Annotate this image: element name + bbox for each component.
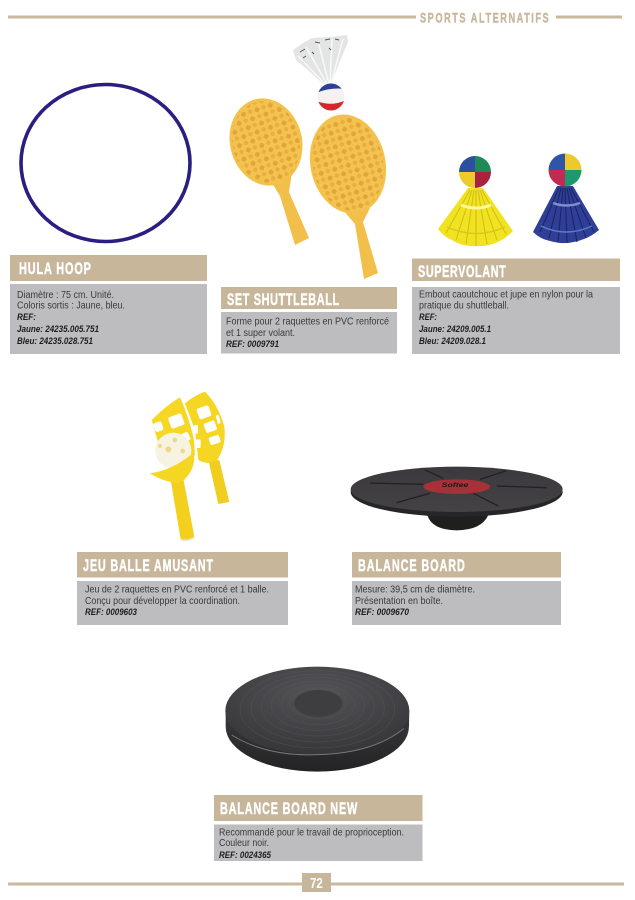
- text block: balance board new details: Recommandé pour le travail de proprioception.: [219, 828, 404, 838]
- text block: shuttleball details: Forme pour 2 raquettes en PVC renforcé: [226, 316, 389, 328]
- panel: set shuttleball: [220, 35, 397, 354]
- text block: shuttleball details: [221, 312, 397, 354]
- heading: jeu balle amusant: JEU BALLE AMUSANT: [83, 556, 213, 575]
- text block: balance board details: Présentation en boîte.: [355, 596, 443, 607]
- text block: supervolant details: pratique du shuttleball.: [419, 300, 509, 312]
- heading: supervolant: [412, 258, 620, 281]
- heading: set shuttleball: SET SHUTTLEBALL: [227, 290, 340, 309]
- icon: blue supervolant: [533, 153, 599, 243]
- text block: supervolant details: Bleu: 24209.028.1: [419, 336, 486, 346]
- icon: shuttlecock with tricolour ball: [293, 35, 348, 112]
- text block: hula hoop details: Bleu: 24235.028.751: [17, 336, 93, 346]
- heading: hula hoop: HULA HOOP: [19, 259, 91, 278]
- text block: balance board new details: REF: 0024365: [219, 850, 271, 860]
- text block: shuttleball details: REF: 0009791: [226, 339, 279, 349]
- text block: balance board details: Mesure: 39,5 cm de diamètre.: [355, 584, 475, 596]
- text block: balance board new details: Couleur noir.: [219, 838, 269, 849]
- panel: jeu balle amusant: [77, 392, 288, 625]
- heading: supervolant: SUPERVOLANT: [418, 262, 506, 281]
- icon: balance board with red centre: [351, 467, 563, 530]
- text block: shuttleball details: et 1 super volant.: [226, 328, 295, 339]
- icon: hula hoop ring: [21, 84, 190, 242]
- text block: jeu balle details: Conçu pour développer la coordination.: [85, 596, 240, 607]
- heading: balance board new: [214, 795, 422, 821]
- icon: right racket: [301, 107, 395, 279]
- panel: supervolant: [412, 153, 620, 354]
- text block: supervolant details: Embout caoutchouc et jupe en nylon pour la: [419, 290, 593, 300]
- icon: yellow supervolant: [438, 156, 513, 246]
- heading: balance board: [352, 552, 561, 578]
- icon: balance board with red centre: Softee: [442, 482, 469, 489]
- text block: hula hoop details: REF:: [17, 312, 36, 322]
- icon: round black balance disc: [225, 667, 409, 772]
- icon: left racket: [220, 91, 312, 245]
- heading: balance board: BALANCE BOARD: [358, 556, 465, 575]
- heading: jeu balle amusant: [77, 552, 288, 578]
- text block: balance board new details: [214, 824, 422, 861]
- text block: jeu balle details: [77, 581, 288, 625]
- page footer with page number: [8, 873, 624, 892]
- heading: set shuttleball: [221, 287, 397, 309]
- text block: jeu balle details: Jeu de 2 raquettes en PVC renforcé et 1 balle.: [85, 584, 269, 596]
- text block: jeu balle details: REF: 0009603: [85, 607, 137, 617]
- icon: scoop rackets with ball: [150, 392, 229, 541]
- page header: SPORTS ALTERNATIFS: [420, 10, 549, 26]
- heading: hula hoop: [10, 255, 207, 281]
- text block: hula hoop details: Diamètre : 75 cm. Unité.: [17, 290, 114, 301]
- text block: hula hoop details: [10, 284, 207, 354]
- panel: balance board: [351, 467, 563, 625]
- text block: hula hoop details: Jaune: 24235.005.751: [17, 324, 99, 334]
- page header: [8, 10, 622, 26]
- heading: balance board new: BALANCE BOARD NEW: [220, 799, 358, 818]
- text block: balance board details: REF: 0009670: [355, 607, 409, 617]
- panel: balance board new: [214, 667, 422, 861]
- text block: supervolant details: Jaune: 24209.005.1: [419, 324, 491, 334]
- page footer with page number: 72: [310, 875, 323, 891]
- text block: hula hoop details: Coloris sortis : Jaune, bleu.: [17, 300, 125, 312]
- panel: hula hoop: [10, 84, 207, 354]
- text block: supervolant details: [412, 287, 620, 354]
- text block: supervolant details: REF:: [419, 312, 437, 322]
- text block: balance board details: [352, 581, 561, 625]
